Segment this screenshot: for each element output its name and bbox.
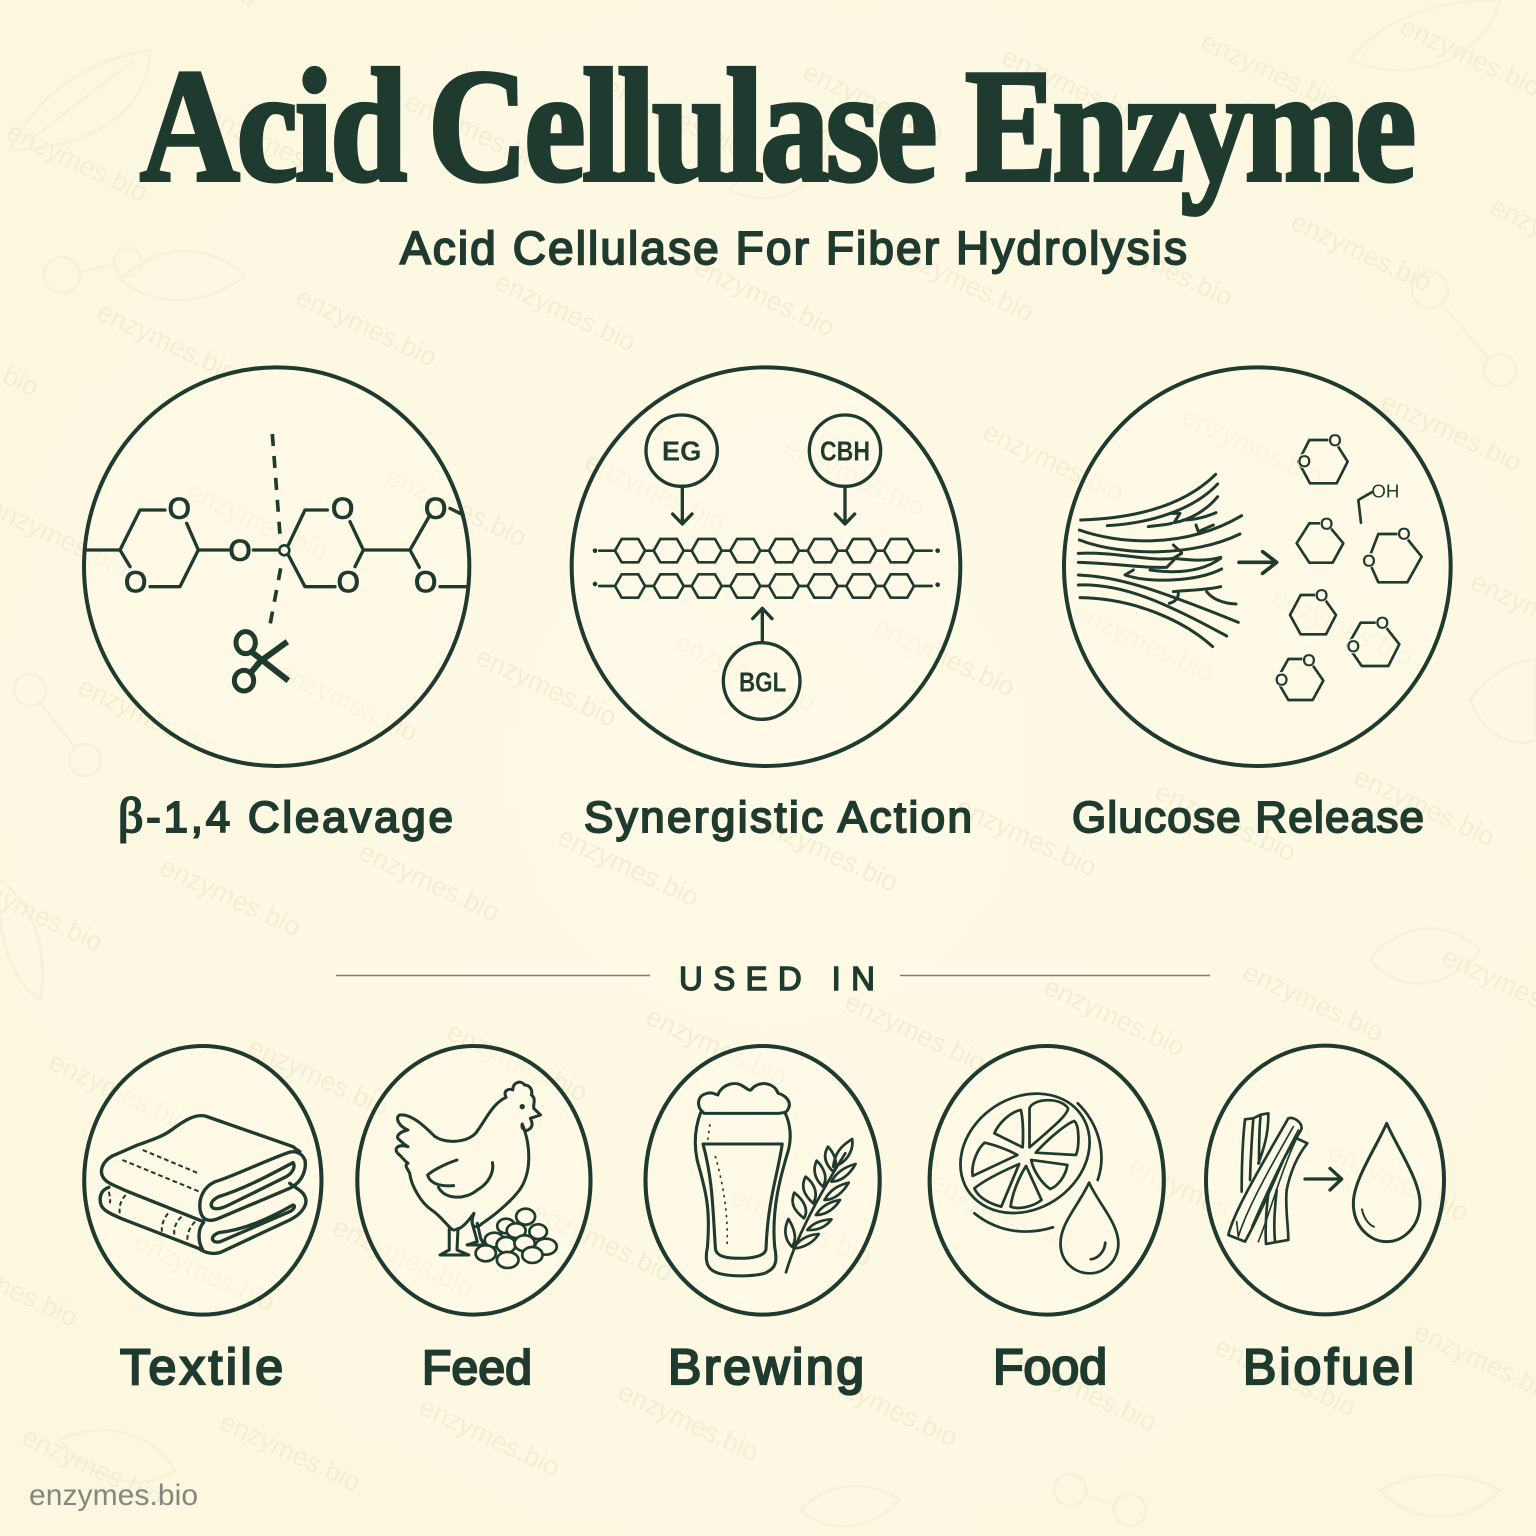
text: enzymes.bio: [1349, 761, 1500, 852]
application: feed: [357, 1046, 591, 1395]
diagram: fibers to glucose: O: [1376, 614, 1389, 633]
text: enzymes.bio: [726, 1181, 877, 1272]
text: enzymes.bio: [580, 446, 731, 537]
label: Brewing: [668, 1339, 864, 1395]
label: β-1,4 Cleavage: [118, 787, 453, 843]
diagram: fibers to glucose: O: [1303, 651, 1316, 670]
label: Feed: [422, 1342, 532, 1395]
text: enzymes.bio: [1087, 221, 1238, 312]
text: enzymes.bio: [1376, 386, 1527, 477]
text: enzymes.bio: [1124, 1151, 1275, 1242]
text: enzymes.bio: [1286, 206, 1437, 297]
text: enzymes.bio: [925, 1166, 1076, 1257]
text: enzymes.bio: [381, 461, 532, 552]
text: enzymes.bio: [400, 86, 551, 177]
icon: beer glass and wheat: [645, 1046, 880, 1315]
diagram: glycosidic bond cleavage: [84, 367, 469, 766]
text: enzymes.bio: [1323, 1136, 1474, 1227]
text: enzymes.bio: [1210, 1331, 1361, 1422]
text: enzymes.bio: [414, 1391, 565, 1482]
diagram: fibers to glucose: O: [1363, 551, 1376, 570]
text: enzymes.bio: [2, 116, 153, 207]
text: enzymes.bio: [155, 851, 306, 942]
text: enzymes.bio: [328, 1211, 479, 1302]
title: Enzyme: [965, 37, 1413, 215]
text: enzymes.bio: [1267, 581, 1418, 672]
text: enzymes.bio: [689, 251, 840, 342]
icon: biomass to fuel drop: [1206, 1046, 1444, 1314]
label: Food: [993, 1339, 1107, 1395]
panel: β-1,4 cleavage: [84, 367, 469, 843]
text: enzymes.bio: [869, 611, 1020, 702]
text: enzymes.bio: [1011, 1346, 1162, 1437]
text: enzymes.bio: [1196, 26, 1347, 117]
diagram: fibers to glucose: O: [1347, 637, 1360, 656]
text: enzymes.bio: [92, 296, 243, 387]
text: enzymes.bio: [442, 1016, 593, 1107]
subtitle: Acid Cellulase For Fiber Hydrolysis: [400, 222, 1187, 274]
text: enzymes.bio: [1177, 401, 1328, 492]
diagram: fibers to glucose: O: [1298, 452, 1311, 471]
diagram: glycosidic bond cleavage: O: [337, 566, 360, 599]
text: enzymes.bio: [840, 986, 991, 1077]
text: enzymes.bio: [798, 56, 949, 147]
text: enzymes.bio: [243, 1031, 394, 1122]
icon: folded towels: [84, 1046, 321, 1315]
text: enzymes.bio: [779, 431, 930, 522]
diagram: fibers to glucose: O: [1329, 431, 1342, 450]
diagram: glycosidic bond cleavage: O: [124, 566, 147, 599]
panel: synergistic action: [572, 367, 972, 842]
diagram: fibers to glucose: [1064, 367, 1451, 766]
application: textile: [84, 1046, 321, 1395]
text: enzymes.bio: [978, 416, 1129, 507]
icon: scissors: [234, 632, 288, 691]
text: enzymes.bio: [215, 1406, 366, 1497]
title: Cellulase: [428, 37, 934, 215]
diagram: glycosidic bond cleavage: O: [424, 493, 447, 526]
diagram: enzymes on cellulose chains: [572, 367, 960, 766]
text: enzymes.bio: [527, 1196, 678, 1287]
text: enzymes.bio: [182, 476, 333, 567]
text: enzymes.bio: [1150, 776, 1301, 867]
text: enzymes.bio: [1039, 971, 1190, 1062]
text: enzymes.bio: [354, 836, 505, 927]
application: biofuel: [1206, 1046, 1444, 1395]
text: enzymes.bio: [17, 1421, 168, 1512]
text: enzymes.bio: [201, 101, 352, 192]
heading: used in: USED IN: [679, 960, 875, 997]
text: enzymes.bio: [1068, 596, 1219, 687]
text: enzymes.bio: [44, 1046, 195, 1137]
diagram: fibers to glucose: OH: [1371, 480, 1399, 501]
text: enzymes.bio: [1238, 956, 1389, 1047]
text: enzymes.bio: [73, 671, 224, 762]
footer brand: enzymes.bio: [29, 1479, 198, 1512]
panel: glucose release: [1064, 367, 1451, 842]
text: enzymes.bio: [752, 806, 903, 897]
text: enzymes.bio: [997, 41, 1148, 132]
application: food: [930, 1046, 1164, 1395]
text: enzymes.bio: [641, 1001, 792, 1092]
label: Synergistic Action: [584, 793, 972, 842]
application: brewing: [645, 1046, 880, 1395]
text: enzymes.bio: [888, 236, 1039, 327]
diagram: fibers to glucose: O: [1315, 586, 1328, 605]
diagram: enzymes on cellulose chains: CBH: [820, 436, 870, 467]
text: enzymes.bio: [129, 1226, 280, 1317]
label: Textile: [120, 1339, 283, 1395]
diagram: enzymes on cellulose chains: BGL: [739, 666, 786, 697]
icon: citrus slice and drop: [930, 1046, 1164, 1315]
text: enzymes.bio: [812, 1361, 963, 1452]
text: enzymes.bio: [599, 71, 750, 162]
label: Biofuel: [1243, 1339, 1414, 1395]
diagram: fibers to glucose: O: [1275, 670, 1288, 689]
text: enzymes.bio: [951, 791, 1102, 882]
diagram: fibers to glucose: O: [1398, 525, 1411, 544]
text: enzymes.bio: [670, 626, 821, 717]
diagram: glycosidic bond cleavage: O: [414, 566, 437, 599]
diagram: enzymes on cellulose chains: EG: [662, 436, 701, 467]
text: enzymes.bio: [553, 821, 704, 912]
text: enzymes.bio: [471, 641, 622, 732]
label: Glucose Release: [1072, 793, 1424, 842]
text: enzymes.bio: [291, 281, 442, 372]
diagram: glycosidic bond cleavage: O: [331, 493, 354, 526]
text: enzymes.bio: [272, 656, 423, 747]
diagram: fibers to glucose: O: [1320, 514, 1333, 533]
text: enzymes.bio: [490, 266, 641, 357]
diagram: glycosidic bond cleavage: O: [229, 534, 251, 567]
title: Acid: [140, 37, 406, 215]
icon: hen and grain: [357, 1046, 591, 1315]
diagram: glycosidic bond cleavage: O: [168, 493, 191, 526]
text: enzymes.bio: [613, 1376, 764, 1467]
